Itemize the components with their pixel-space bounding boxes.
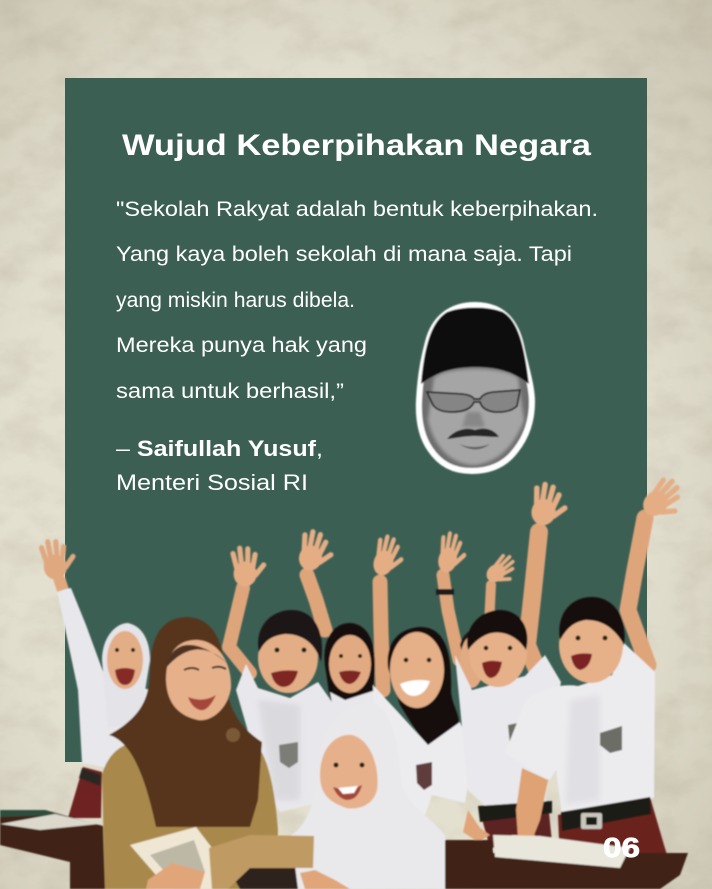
- right desk with open notebook: [445, 835, 688, 889]
- attribution: Menteri Sosial RI: [116, 470, 308, 495]
- students and teacher illustration: [0, 476, 688, 889]
- attribution: – Saifullah Yusuf ,: [116, 436, 323, 461]
- teacher: [102, 617, 278, 889]
- student: hidden child: [460, 629, 488, 688]
- student: boy second from left: [236, 610, 339, 812]
- wristwatch: [436, 589, 454, 595]
- dark skirt under book: [228, 868, 315, 889]
- raised hands: [233, 476, 688, 590]
- attribution: [116, 436, 323, 495]
- student: laughing girl with long hair: [373, 627, 473, 830]
- student far left: raised arm and hijab: [41, 539, 150, 818]
- left desk: [0, 810, 105, 889]
- open book: [130, 827, 314, 889]
- title: Wujud Keberpihakan Negara: [122, 129, 591, 162]
- quote text: [116, 198, 598, 403]
- quote text: Mereka punya hak yang: [116, 334, 367, 357]
- student: girl behind: [324, 623, 385, 725]
- quote text: yang miskin harus dibela.: [116, 289, 355, 312]
- student: front girl with white hijab: [291, 703, 452, 889]
- student: boy far right: [495, 597, 668, 865]
- hands on book: [146, 863, 350, 889]
- quote text: Yang kaya boleh sekolah di mana saja. Tapi: [116, 243, 572, 266]
- student: boy fifth: [455, 610, 561, 848]
- page number: 06: [603, 832, 640, 863]
- portrait: Saifullah Yusuf: [419, 305, 532, 471]
- green panel: [65, 78, 647, 762]
- student: raised arms back row: [229, 518, 648, 690]
- quote text: sama untuk berhasil,”: [116, 380, 344, 403]
- quote text: "Sekolah Rakyat adalah bentuk keberpihakan.: [116, 198, 598, 221]
